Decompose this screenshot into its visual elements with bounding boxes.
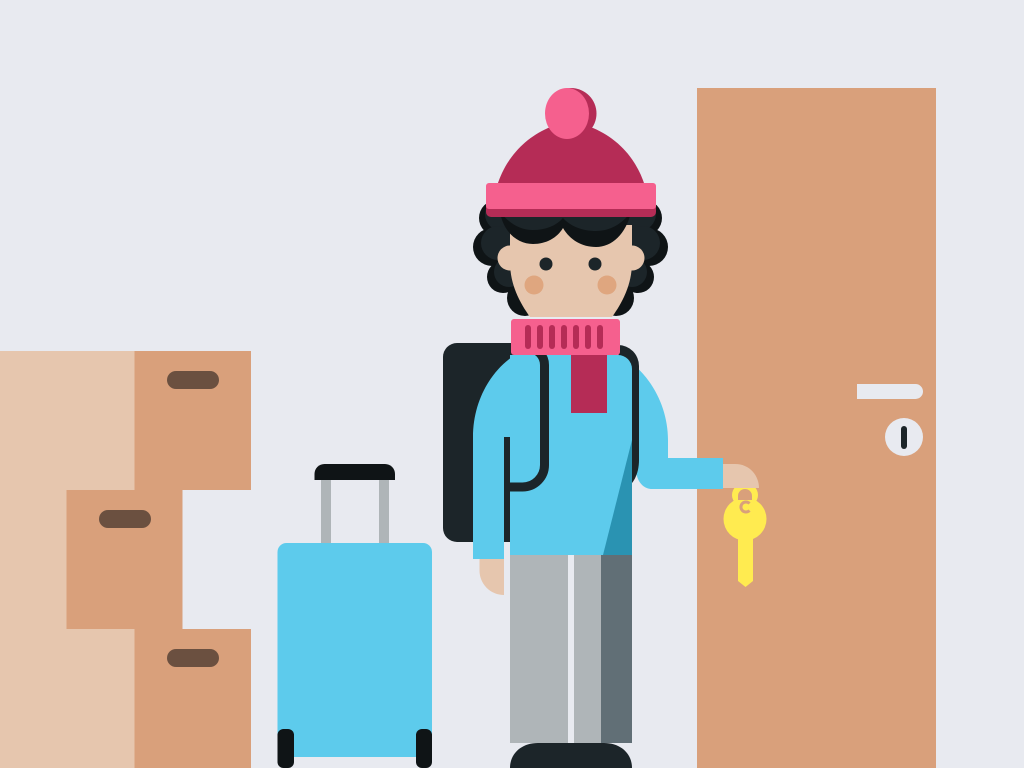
eyes <box>540 258 602 270</box>
hair <box>473 197 668 316</box>
suitcase pull handle <box>314 464 395 544</box>
bottom box <box>0 629 251 768</box>
key ring hole <box>738 489 752 500</box>
door <box>697 88 936 768</box>
shoes <box>510 743 632 768</box>
suitcase body <box>278 543 432 757</box>
key bow notch <box>741 502 750 512</box>
winter hat <box>486 88 656 217</box>
ears <box>498 246 644 270</box>
suitcase <box>278 464 432 768</box>
face <box>498 225 644 317</box>
pompom <box>545 88 596 139</box>
scarf tail <box>571 350 607 413</box>
stacked cardboard boxes <box>0 351 251 768</box>
left backpack strap <box>504 348 544 542</box>
hat dome <box>497 122 645 186</box>
hat brim <box>486 183 656 217</box>
suitcase wheels <box>278 729 432 768</box>
scarf ribs <box>525 325 603 349</box>
scarf collar <box>511 319 620 355</box>
door handle <box>857 384 923 399</box>
right arm <box>625 358 723 489</box>
hand holding key <box>723 464 759 488</box>
backpack <box>443 343 520 542</box>
trousers <box>510 555 632 743</box>
door lock <box>885 418 923 456</box>
middle box <box>0 490 182 629</box>
head <box>510 225 632 317</box>
fringe <box>500 212 631 247</box>
left arm <box>473 355 545 559</box>
top box <box>0 351 251 490</box>
torso <box>510 355 632 555</box>
torso shadow <box>603 440 632 555</box>
key <box>724 483 766 587</box>
right backpack strap <box>618 345 639 483</box>
person <box>443 88 766 768</box>
cheeks <box>524 276 616 294</box>
left hand <box>480 558 504 595</box>
